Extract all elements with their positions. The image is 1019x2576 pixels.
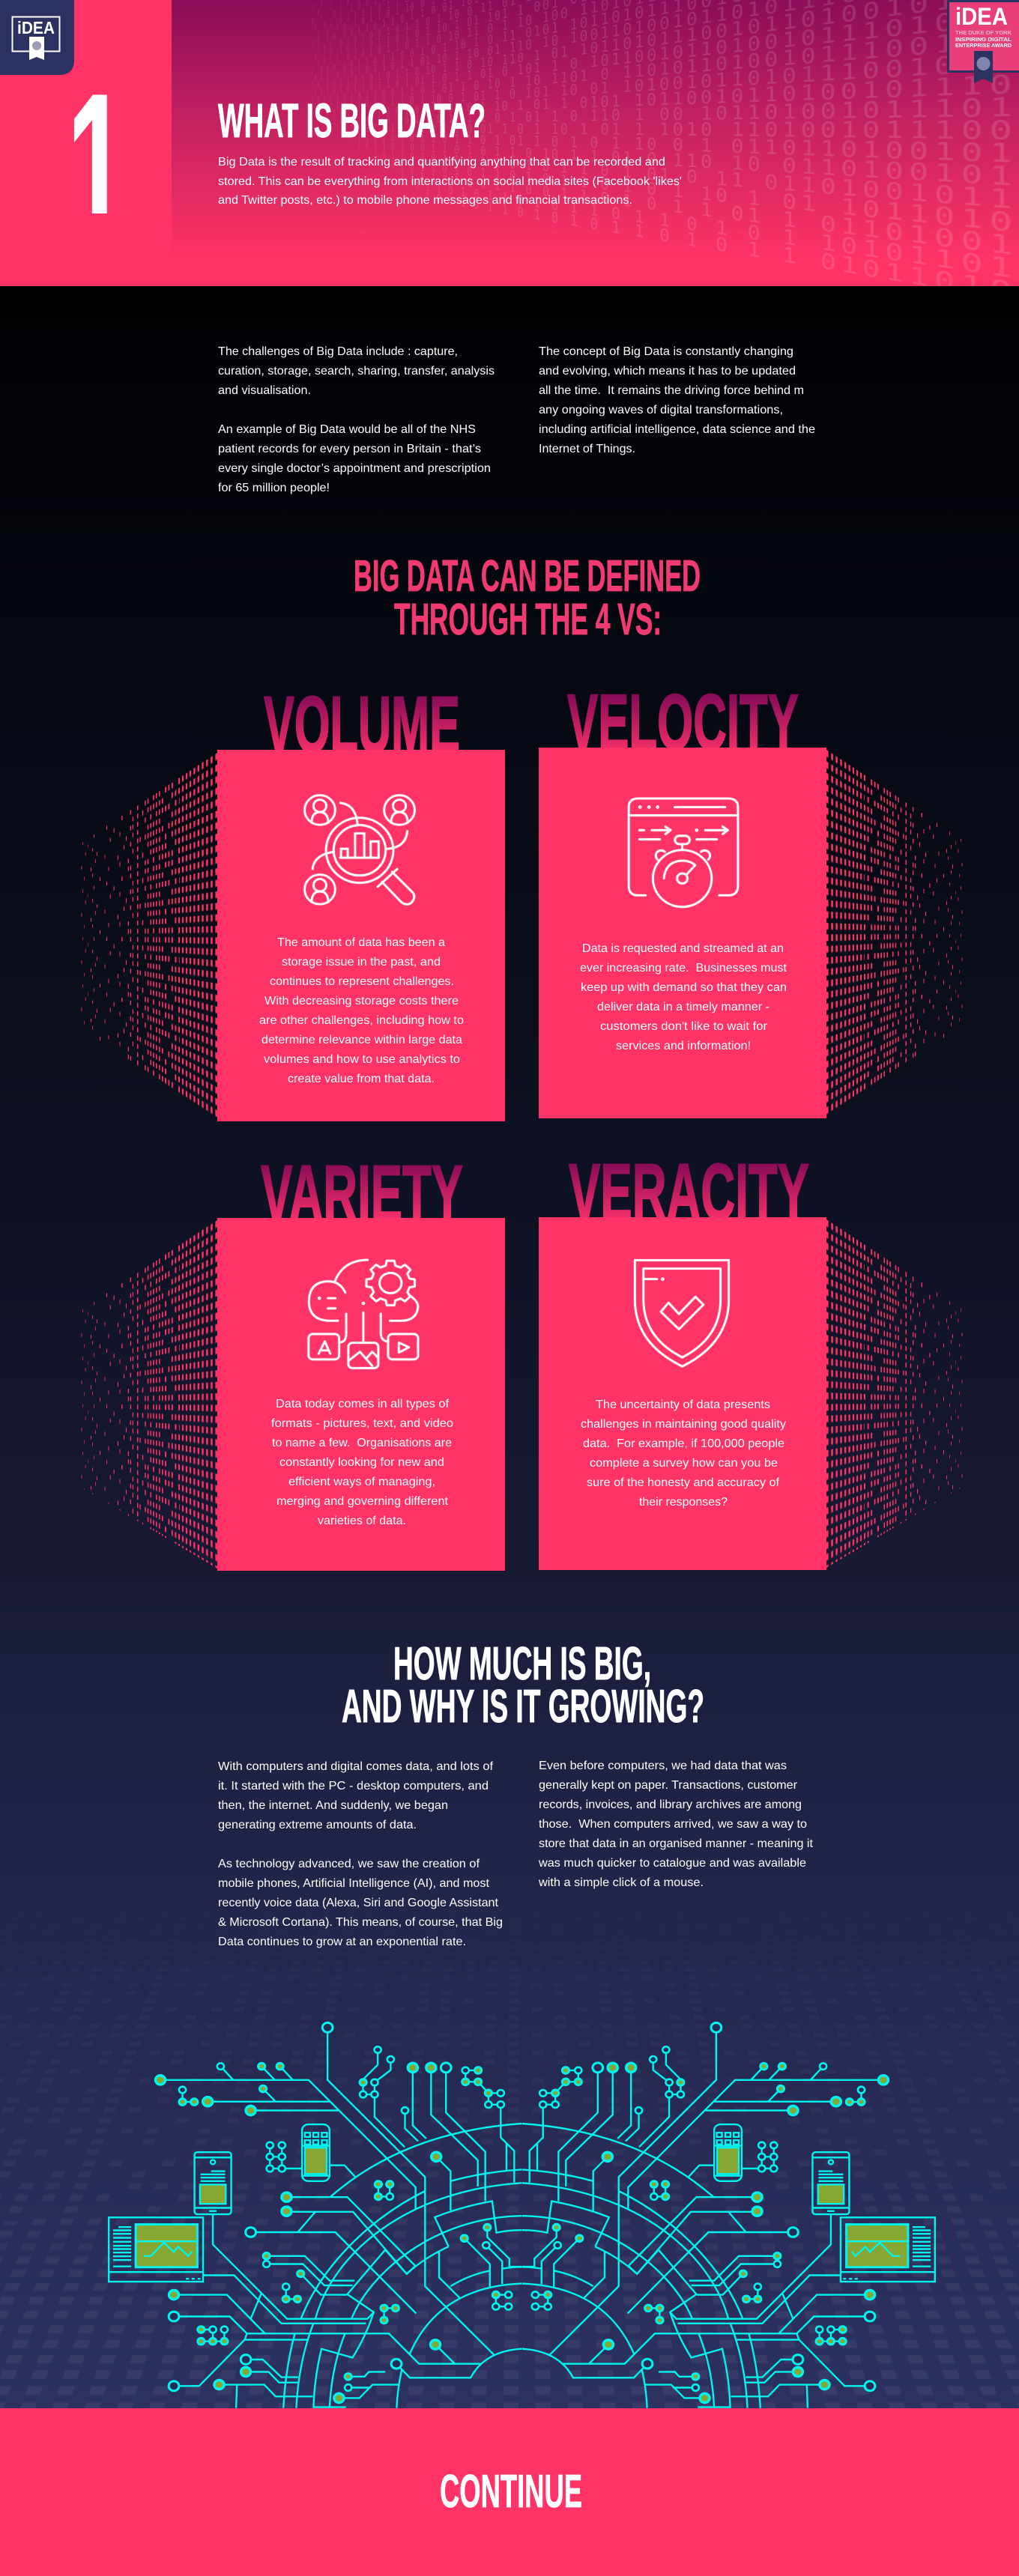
variety title: VARIETY (261, 1148, 463, 1238)
left pink band (0, 0, 172, 286)
intro text: Big Data is the result of tracking and quantifying anything that can be recorded and (218, 156, 665, 169)
text block: challenges: for 65 million people! (218, 482, 330, 494)
variety card (217, 1218, 505, 1571)
big hollow terminals (169, 2022, 451, 2391)
panel: volume (217, 679, 505, 1121)
text block: before computers: store that data in an organised manner - meaning it (539, 1837, 814, 1850)
text block: concept: The concept of Big Data is constantly changing (539, 345, 793, 358)
band background (0, 2408, 1019, 2576)
intro text: and Twitter posts, etc.) to mobile phone messages and financial transactions. (218, 194, 632, 207)
velocity text: ever increasing rate. Businesses must (580, 962, 787, 975)
volume text: are other challenges, including how to (259, 1014, 464, 1027)
text block: before computers: records, invoices, and library archives are among (539, 1798, 802, 1811)
veracity text (581, 1398, 786, 1509)
heading: 4 Vs: THROUGH THE 4 VS: (394, 595, 662, 644)
velocity text (580, 942, 787, 1052)
text block: before computers: generally kept on paper. Transactions, customer (539, 1779, 798, 1792)
text block: before computers: with a simple click of a mouse. (538, 1876, 704, 1889)
logo tab (0, 0, 74, 75)
text block: computers: then, the internet. And suddenly, we began (218, 1799, 448, 1812)
logo tab: iDEA (17, 18, 55, 37)
background pattern: perspective floor of dashes (0, 2163, 1019, 2408)
velocity text: Data is requested and streamed at an (582, 942, 784, 955)
intro text (218, 156, 682, 207)
panel: veracity (539, 1147, 826, 1570)
variety data dot wall (81, 1220, 217, 1569)
continue label: CONTINUE (440, 2466, 582, 2518)
continue band (0, 2408, 1019, 2576)
big green terminals (156, 2063, 441, 2402)
veracity title: VERACITY (569, 1147, 809, 1237)
volume text (259, 936, 464, 1085)
icon: browser with stopwatch (629, 798, 738, 907)
velocity text: customers don't like to wait for (600, 1020, 768, 1033)
veracity text: data. For example, if 100,000 people (583, 1437, 784, 1450)
heading: 4 Vs: BIG DATA CAN BE DEFINED (354, 551, 701, 601)
text block: before computers (538, 1760, 814, 1889)
text block: computers: generating extreme amounts of data. (218, 1819, 417, 1831)
velocity text: deliver data in a timely manner - (597, 1001, 769, 1013)
text block: computers (218, 1760, 503, 1948)
text block: computers: As technology advanced, we saw the creation of (218, 1858, 480, 1870)
small green nodes (179, 2063, 499, 2380)
velocity text: services and information! (616, 1040, 751, 1052)
variety text: efficient ways of managing, (288, 1476, 435, 1488)
velocity card (539, 748, 826, 1118)
icon: shield with check (635, 1260, 729, 1366)
volume text: volumes and how to use analytics to (264, 1053, 460, 1066)
text block: before computers: was much quicker to catalogue and was available (538, 1857, 806, 1870)
award badge: INSPIRING DIGITAL (955, 36, 1012, 43)
volume text: determine relevance within large data (261, 1034, 462, 1046)
small hollow nodes (179, 2046, 512, 2391)
text block: challenges: The challenges of Big Data include : capture, (218, 345, 458, 358)
volume text: continues to represent challenges. (270, 975, 454, 988)
variety text: merging and governing different (276, 1495, 449, 1508)
veracity card (539, 1217, 826, 1570)
variety text: constantly looking for new and (279, 1456, 444, 1469)
veracity text: their responses? (639, 1496, 728, 1509)
award badge: THE DUKE OF YORK (955, 29, 1012, 36)
circuit left half (109, 2022, 521, 2408)
panel: velocity (539, 679, 826, 1118)
text block: computers: recently voice data (Alexa, Siri and Google Assistant (218, 1897, 499, 1909)
text block: challenges: An example of Big Data would be all of the NHS (218, 423, 476, 436)
veracity data dot wall (826, 1219, 962, 1568)
veracity text: sure of the honesty and accuracy of (587, 1476, 780, 1489)
heading: how much is big (342, 1638, 704, 1733)
variety text: varieties of data. (318, 1515, 406, 1527)
velocity title: VELOCITY (567, 679, 799, 766)
veracity text: The uncertainty of data presents (596, 1398, 770, 1411)
text block: computers: With computers and digital comes data, and lots of (218, 1760, 494, 1773)
text block: concept: all the time. It remains the driving force behind m (539, 384, 804, 397)
title: what is big data: WHAT IS BIG DATA? (218, 94, 486, 148)
text block: challenges: curation, storage, search, sharing, transfer, analysis (218, 365, 495, 378)
big number 1: 1 (67, 47, 127, 291)
text block: computers: mobile phones, Artificial Intelligence (AI), and most (218, 1877, 490, 1890)
award badge (947, 0, 1019, 83)
text block: before computers: Even before computers, we had data that was (539, 1760, 787, 1772)
veracity text: complete a survey how can you be (590, 1457, 778, 1470)
text block: computers: Data continues to grow at an exponential rate. (218, 1936, 466, 1948)
text block: computers: & Microsoft Cortana). This means, of course, that Big (218, 1916, 503, 1929)
text block: concept: including artificial intelligence, data science and the (539, 423, 815, 436)
variety text: to name a few. Organisations are (272, 1437, 452, 1449)
variety text: formats - pictures, text, and video (271, 1417, 453, 1430)
volume card (217, 750, 505, 1121)
intro text: stored. This can be everything from interactions on social media sites (Facebook 'likes' (218, 175, 682, 188)
text block: challenges: patient records for every person in Britain - that’s (218, 443, 481, 455)
heading: how much is big: AND WHY IS IT GROWING? (342, 1681, 704, 1733)
volume title: VOLUME (264, 679, 460, 769)
panel: variety (217, 1148, 505, 1571)
volume text: storage issue in the past, and (282, 956, 441, 969)
heading: how much is big: HOW MUCH IS BIG, (393, 1638, 651, 1690)
variety text (271, 1398, 453, 1527)
award badge: iDEA (955, 3, 1008, 30)
text block: concept: Internet of Things. (539, 443, 635, 455)
volume text: The amount of data has been a (277, 936, 445, 949)
award badge: ENTERPRISE AWARD (955, 42, 1012, 49)
heading: 4 Vs (354, 551, 701, 644)
volume text: With decreasing storage costs there (264, 995, 459, 1007)
veracity text: challenges in maintaining good quality (581, 1418, 786, 1431)
text block: challenges: and visualisation. (218, 384, 311, 397)
text block: challenges: every single doctor’s appointment and prescription (218, 462, 491, 475)
volume text: create value from that data. (288, 1073, 435, 1085)
text block: computers: it. It started with the PC - desktop computers, and (218, 1780, 489, 1792)
velocity data dot wall (826, 750, 962, 1115)
icon: cloud gear and media (309, 1260, 418, 1368)
text block: concept (539, 345, 815, 455)
variety text: Data today comes in all types of (276, 1398, 450, 1410)
velocity text: keep up with demand so that they can (581, 981, 787, 994)
text block: before computers: those. When computers arrived, we saw a way to (539, 1818, 807, 1831)
section number panel (0, 0, 172, 291)
circuit right half (522, 2022, 935, 2408)
icon: magnifier with people and chart (305, 795, 414, 904)
chart: circuit board illustration (109, 2022, 935, 2408)
text block: challenges (218, 345, 495, 494)
volume data dot wall (81, 753, 217, 1118)
text block: concept: any ongoing waves of digital transformations, (539, 404, 783, 416)
text block: concept: and evolving, which means it has to be updated (539, 365, 796, 378)
